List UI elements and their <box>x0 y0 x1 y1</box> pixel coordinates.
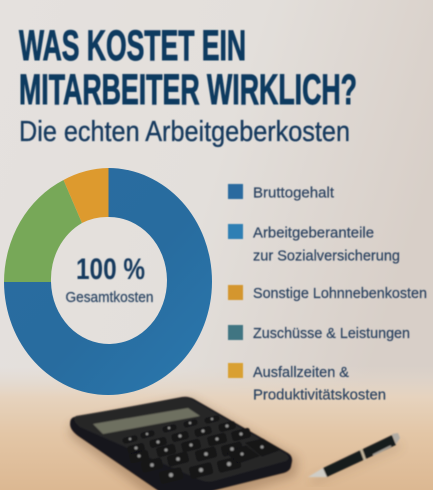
heading: WAS KOSTET EIN <box>19 22 246 70</box>
heading <box>19 22 357 114</box>
legend item: Bruttogehalt: Bruttogehalt <box>253 184 335 202</box>
slice: orange <box>64 168 108 223</box>
donut chart <box>4 168 212 395</box>
legend item: Sonstige Lohnnebenkosten: Sonstige Lohnnebenkosten <box>253 285 427 302</box>
legend item: Ausfallzeiten & Produktivitätskosten: Ausfallzeiten & <box>253 364 349 381</box>
legend item: Arbeitgeberanteile: Arbeitgeberanteile <box>253 224 374 242</box>
subtitle: Die echten Arbeitgeberkosten <box>19 116 350 148</box>
icon: calculator <box>70 397 298 490</box>
legend <box>228 184 427 404</box>
center: total label <box>66 253 154 306</box>
calculator key highlights <box>129 418 264 477</box>
wooden table <box>0 366 433 490</box>
calculator keys <box>123 415 279 483</box>
legend item: Zuschüsse & Leistungen: Zuschüsse & Leistungen <box>253 325 410 342</box>
center: total label: Gesamtkosten <box>66 290 154 306</box>
legend item: Ausfallzeiten & Produktivitätskosten: Produktivitätskosten <box>253 386 386 404</box>
legend item: Arbeitgeberanteile <box>228 224 400 264</box>
icon: pen <box>308 433 400 482</box>
center: total label: 100 % <box>76 253 145 286</box>
legend item: Arbeitgeberanteile: zur Sozialversicherung <box>253 248 400 264</box>
slice: main blue <box>4 168 212 395</box>
calculator display <box>93 408 200 434</box>
legend item: Ausfallzeiten & Produktivitätskosten <box>228 363 386 404</box>
slice: green <box>4 180 82 282</box>
